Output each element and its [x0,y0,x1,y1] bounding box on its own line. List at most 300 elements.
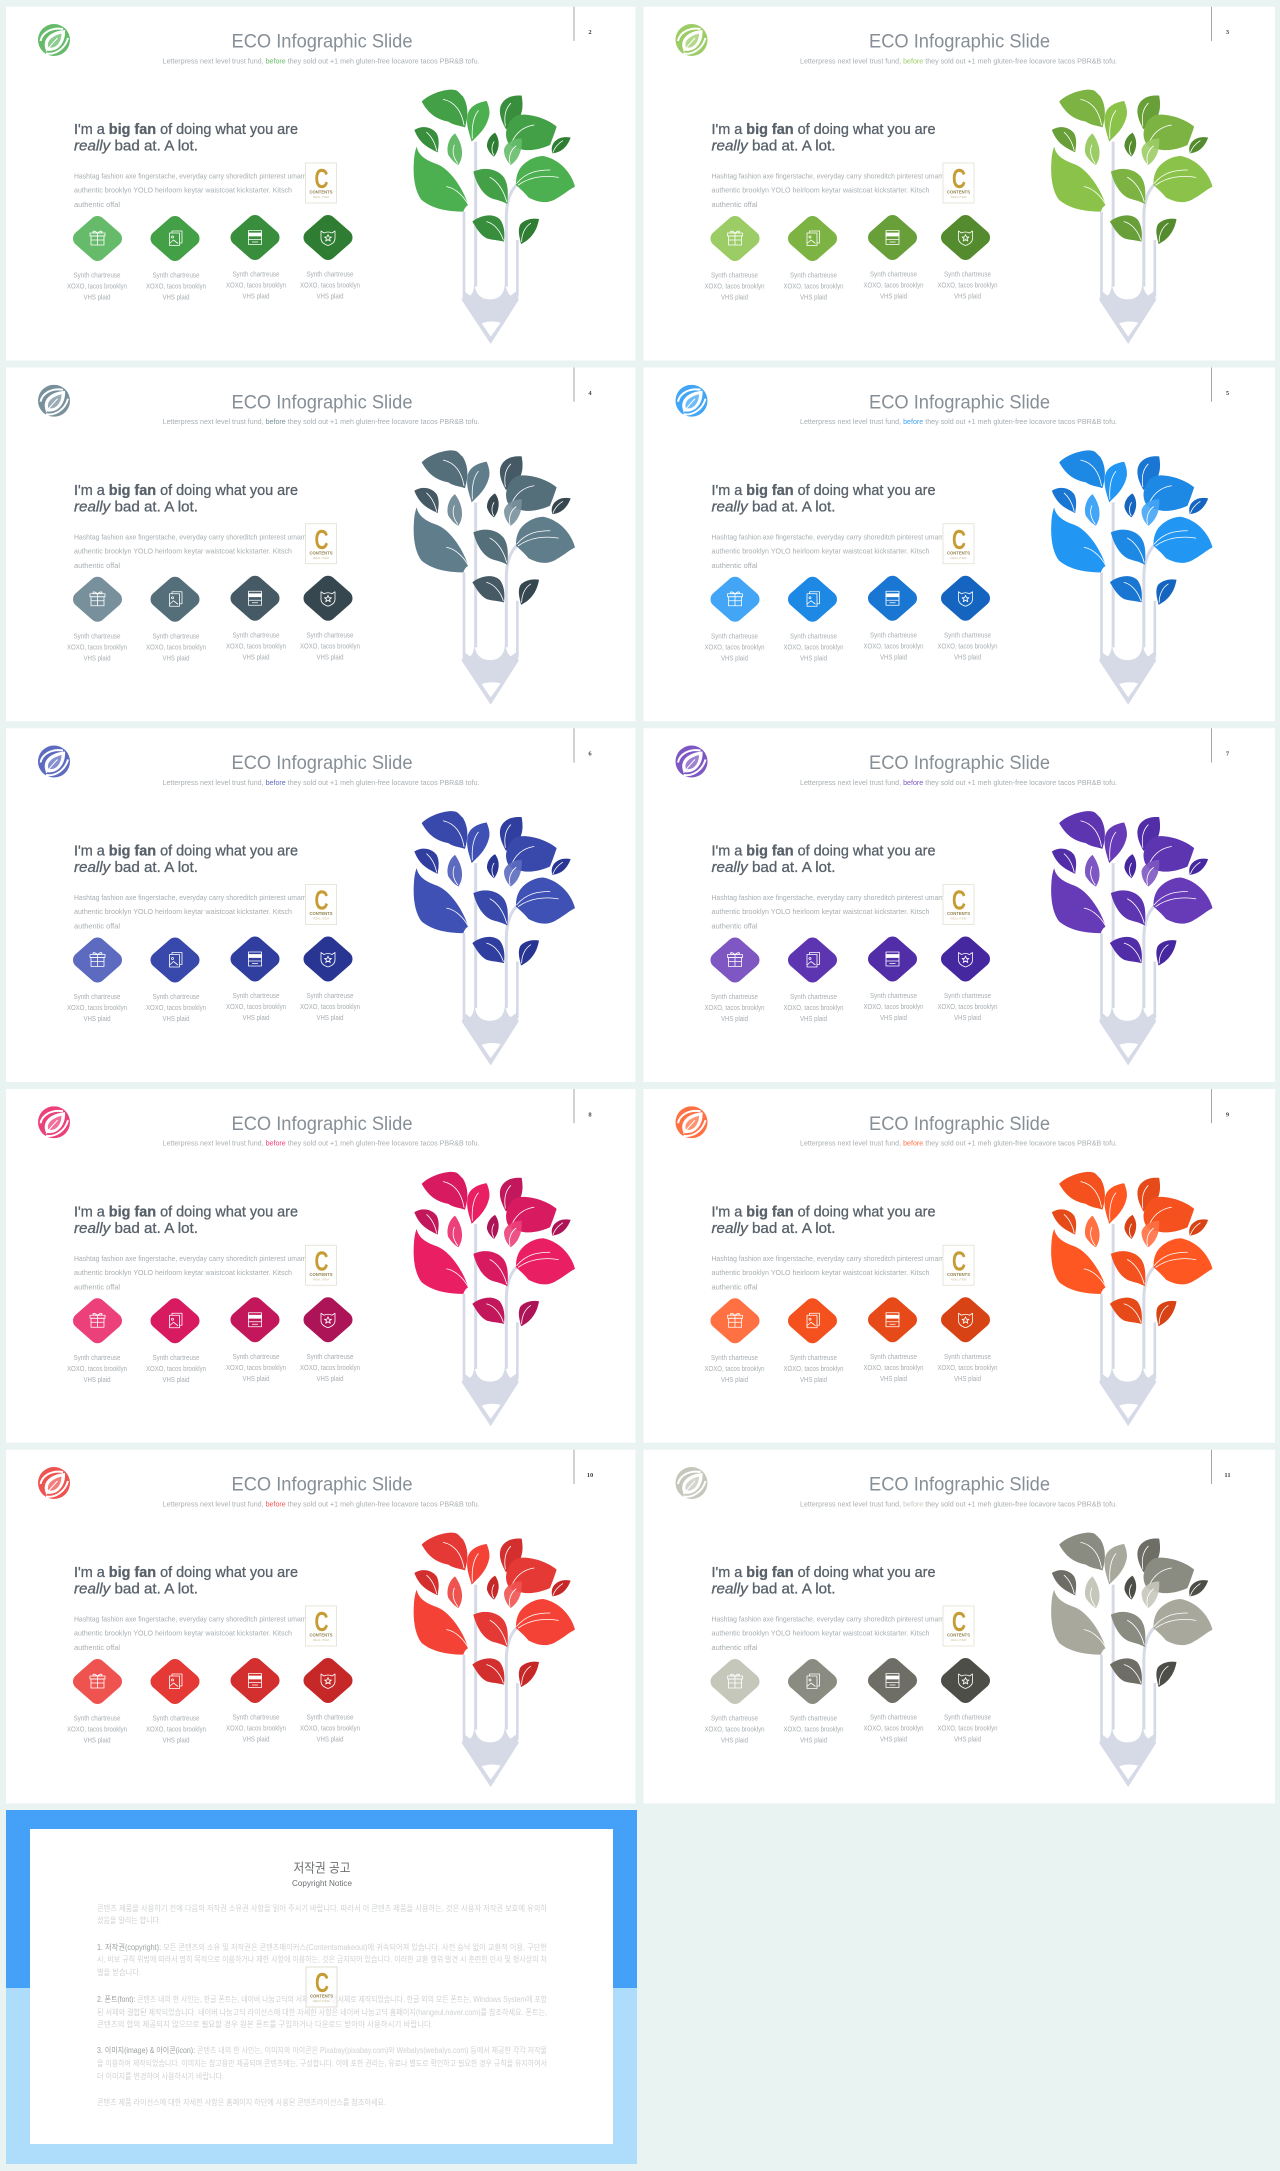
feature: shield: Synth chartreuse [944,1714,991,1722]
illustration: pencil tree [1051,811,1212,1066]
page tab [1212,1089,1230,1123]
feature: image: Synth chartreuse [790,994,837,1001]
paragraph: Hashtag fashion axe fingerstache, everyday carry shoreditch pinterest umami [712,893,946,902]
page tab: 10 [587,1472,593,1479]
copyright subtitle: Copyright Notice [292,1879,353,1888]
title: ECO Infographic Slide [232,752,412,774]
feature: calendar: XOXO, tacos brooklyn [864,1004,924,1011]
feature: gift: XOXO, tacos brooklyn [67,1005,127,1012]
heading: I'm a big fan of doing what you are [712,1204,936,1220]
feature: calendar [226,223,286,300]
paragraph [74,893,308,930]
copyright title: 저작권 공고 [294,1860,351,1876]
badge: REAL ITEM [951,556,967,560]
paragraph: Hashtag fashion axe fingerstache, everyday carry shoreditch pinterest umami [712,172,946,180]
badge: REAL ITEM [313,916,329,920]
feature: gift: Synth chartreuse [711,1355,758,1362]
feature: shield: Synth chartreuse [306,632,354,639]
badge: C [952,884,966,916]
feature: gift: VHS plaid [721,1377,748,1384]
feature: shield: VHS plaid [954,1015,981,1022]
page tab: 7 [1226,750,1230,758]
icon: leaf logo [38,385,70,417]
badge: REAL ITEM [313,195,329,199]
feature: image: XOXO, tacos brooklyn [784,1366,844,1373]
badge: CONTENTS [947,550,970,555]
feature: image: VHS plaid [162,1377,190,1384]
feature: shield: VHS plaid [316,1015,344,1022]
badge: REAL ITEM [313,1277,329,1281]
paragraph: Hashtag fashion axe fingerstache, everyday carry shoreditch pinterest umami [712,1614,946,1624]
illustration: pencil tree [1051,1172,1212,1426]
feature: gift [704,1667,765,1744]
paragraph [712,893,946,930]
paragraph: authentic brooklyn YOLO heirloom keytar waistcoat kickstarter. Kitsch [712,1268,930,1277]
feature: shield: VHS plaid [954,294,981,300]
badge [306,1967,337,2007]
slide background [644,1450,1275,1804]
feature: shield: Synth chartreuse [944,1354,991,1361]
white card [30,1829,613,2144]
page tab: 5 [1226,390,1230,397]
feature: gift: Synth chartreuse [74,1355,121,1362]
slide background [6,728,636,1082]
heading [74,483,298,515]
page tab [1212,1450,1231,1484]
feature: calendar: VHS plaid [880,1736,907,1744]
feature: calendar: Synth chartreuse [232,272,280,278]
title: ECO Infographic Slide [869,1474,1050,1496]
page tab: 2 [588,29,592,36]
notice intro: 셨음을 알리는 합니다. [97,1915,161,1925]
heading: really bad at. A lot. [74,1221,198,1237]
feature: image: XOXO, tacos brooklyn [146,1726,206,1734]
subtitle: Letterpress next level trust fund, before they sold out +1 meh gluten-free locavore tacos PBR&B tofu. [162,417,480,426]
badge: C [314,163,328,194]
feature: gift [67,224,127,302]
feature: gift: VHS plaid [84,1377,111,1384]
feature: image: VHS plaid [800,1377,827,1384]
badge [943,884,974,924]
paragraph: authentic brooklyn YOLO heirloom keytar waistcoat kickstarter. Kitsch [74,1268,292,1277]
badge: C [952,1606,966,1637]
feature: calendar: VHS plaid [880,1376,907,1383]
feature: calendar [864,223,924,300]
feature: image: VHS plaid [162,1016,190,1023]
feature: image: VHS plaid [800,294,827,302]
panel: slide 3 lime [644,7,1275,360]
slide background [6,367,636,721]
feature: calendar: Synth chartreuse [232,1714,280,1722]
feature: image: XOXO, tacos brooklyn [784,644,844,651]
heading: I'm a big fan of doing what you are [74,844,298,860]
feature: gift: VHS plaid [721,1016,748,1023]
feature: shield: VHS plaid [316,654,344,661]
feature: gift [67,946,127,1023]
feature: calendar: VHS plaid [242,294,270,300]
feature: shield [300,1666,360,1744]
heading: I'm a big fan of doing what you are [712,1565,936,1581]
heading [74,844,298,876]
background: blue top band [6,1810,637,1988]
icon: leaf logo [38,1106,70,1138]
feature: calendar: XOXO, tacos brooklyn [226,1365,286,1372]
feature: calendar [864,584,924,661]
badge: CONTENTS [310,1994,333,1998]
subtitle: Letterpress next level trust fund, before they sold out +1 meh gluten-free locavore tacos PBR&B tofu. [800,778,1117,787]
panel: slide 11 grey [644,1450,1275,1804]
feature: shield: VHS plaid [954,1736,981,1744]
feature: image: Synth chartreuse [790,633,837,640]
feature: calendar: Synth chartreuse [870,272,917,278]
page tab [574,728,592,762]
feature: image [784,1667,844,1744]
feature: gift [67,1306,127,1384]
feature: calendar [226,944,286,1022]
subtitle: Letterpress next level trust fund, before they sold out +1 meh gluten-free locavore tacos PBR&B tofu. [800,1499,1117,1508]
feature: shield [300,223,360,300]
background: light blue bottom band [6,1988,637,2164]
paragraph: authentic offal [712,922,758,930]
illustration: pencil tree [414,1172,575,1426]
notice 1: copyright: 1. 저작권(copyright): 모든 콘텐츠의 소유 및 저작권은 콘텐츠메이커스(Contentsmakeout)에 귀속되어져 있습니다. 사전 승낙 없이 교환적 이용, 구단현 [97,1942,547,1952]
feature: image: Synth chartreuse [152,994,200,1001]
feature: image: Synth chartreuse [790,1355,837,1362]
subtitle: Letterpress next level trust fund, before they sold out +1 meh gluten-free locavore tacos PBR&B tofu. [162,56,480,65]
panel: slide 5 blue [644,367,1275,721]
page tab: 6 [588,750,592,758]
paragraph: authentic brooklyn YOLO heirloom keytar waistcoat kickstarter. Kitsch [74,1629,292,1638]
title: ECO Infographic Slide [232,1113,412,1135]
feature: shield: XOXO, tacos brooklyn [938,1004,998,1011]
feature: calendar: XOXO, tacos brooklyn [864,1726,924,1732]
title: ECO Infographic Slide [869,30,1050,52]
icon: leaf logo [676,1467,708,1499]
panel: slide 8 pink [6,1089,636,1443]
feature: image: VHS plaid [162,294,190,302]
badge: CONTENTS [309,911,333,916]
feature: gift: XOXO, tacos brooklyn [67,1726,127,1734]
notice 2: font: 콘텐츠의 합의 제공되지 않으므로 필요할 경우 원본 폰트를 구입하거나 다운로드 받아야 사용하시기 바랍니다. [97,2019,433,2029]
feature: gift: XOXO, tacos brooklyn [67,1366,127,1373]
page tab: 9 [1226,1111,1230,1118]
feature: calendar: VHS plaid [242,1376,270,1383]
feature: calendar: Synth chartreuse [870,993,917,1000]
feature: shield: XOXO, tacos brooklyn [938,1365,998,1372]
badge: C [315,1967,329,1998]
badge [306,1606,336,1646]
illustration: pencil tree [414,450,575,705]
notice closing line: 콘텐츠 제품 라이선스에 대한 자세한 사항은 홈페이지 하단에 사용된 콘텐츠라이선스를 참조하세요. [97,2097,386,2107]
paragraph: authentic brooklyn YOLO heirloom keytar waistcoat kickstarter. Kitsch [712,546,930,555]
paragraph: authentic offal [712,200,758,209]
paragraph: authentic brooklyn YOLO heirloom keytar waistcoat kickstarter. Kitsch [712,1629,930,1638]
page tab [574,1089,592,1123]
feature: image: Synth chartreuse [152,1355,200,1362]
feature: image: XOXO, tacos brooklyn [146,1005,206,1012]
heading: I'm a big fan of doing what you are [712,844,936,860]
feature: shield: Synth chartreuse [306,272,354,278]
feature: image [146,1306,206,1384]
badge [306,1245,336,1285]
paragraph: authentic brooklyn YOLO heirloom keytar waistcoat kickstarter. Kitsch [712,907,930,916]
badge: CONTENTS [309,550,333,555]
feature: shield [938,1666,998,1744]
panel: slide 6 indigo [6,728,636,1082]
notice 3: image and icon: 더 이미지를 변경하여 사용하시기 바랍니다. [97,2071,224,2081]
feature: calendar: VHS plaid [242,654,270,661]
paragraph [74,1614,308,1652]
paragraph: authentic brooklyn YOLO heirloom keytar waistcoat kickstarter. Kitsch [712,186,930,195]
badge: CONTENTS [309,1272,333,1277]
paragraph [712,1614,946,1652]
heading: I'm a big fan of doing what you are [74,122,298,138]
paragraph: authentic offal [712,561,758,570]
slide background [644,7,1275,360]
feature: shield [300,944,360,1022]
heading: really bad at. A lot. [712,499,836,515]
feature: calendar [864,944,924,1022]
page tab [574,7,592,41]
feature: image: VHS plaid [800,1016,827,1023]
feature: image: XOXO, tacos brooklyn [146,1366,206,1373]
notice intro: 콘텐츠 제품을 사용하기 전에 다음의 저작권 소유권 사항을 읽어 주시기 바랍니다. 따라서 이 콘텐츠 제품을 사용하는, 것은 사용자 저작권 보호에 유의하 [97,1903,548,1913]
feature: gift: VHS plaid [84,294,111,302]
paragraph: Hashtag fashion axe fingerstache, everyday carry shoreditch pinterest umami [74,893,308,902]
feature: calendar: VHS plaid [242,1015,270,1022]
panel: copyright notice [6,1810,637,2164]
feature: gift: Synth chartreuse [74,1716,121,1722]
paragraph [712,532,946,570]
feature: shield: VHS plaid [954,1376,981,1383]
illustration: pencil tree [414,811,575,1066]
feature: image: VHS plaid [800,655,827,662]
feature: gift: XOXO, tacos brooklyn [704,644,765,651]
illustration: pencil tree [1051,1533,1212,1787]
paragraph: authentic offal [74,1643,120,1652]
feature: calendar: VHS plaid [242,1736,270,1744]
notice intro [97,1903,548,1925]
feature: gift [67,1667,127,1744]
feature: gift: VHS plaid [721,655,748,662]
feature: shield [938,1305,998,1383]
feature: image [146,224,206,302]
heading: really bad at. A lot. [712,1221,836,1237]
feature: calendar: XOXO, tacos brooklyn [226,643,286,650]
feature: image: XOXO, tacos brooklyn [146,284,206,290]
badge: CONTENTS [947,1632,970,1638]
paragraph [712,172,946,209]
notice 2: font: 2. 폰트(font): 콘텐츠 내의 한 사인는, 한글 폰트는, 네이버 나눔고딕의 서체 및 시스템서체로 제작되었습니다. 한글 외의 모든 폰트는, Windows System에 포함 [97,1994,548,2004]
feature: calendar: XOXO, tacos brooklyn [226,1726,286,1732]
feature: image [146,1667,206,1744]
feature: image: Synth chartreuse [152,1716,200,1722]
badge: CONTENTS [947,911,970,916]
icon: leaf logo [676,385,708,417]
paragraph: authentic offal [74,200,120,209]
feature: image: XOXO, tacos brooklyn [784,1726,844,1734]
illustration: pencil tree [1051,90,1212,344]
feature: calendar: XOXO, tacos brooklyn [226,1004,286,1011]
feature: gift: XOXO, tacos brooklyn [704,1726,765,1734]
page tab [1212,728,1230,762]
badge: CONTENTS [309,190,333,194]
subtitle: Letterpress next level trust fund, before they sold out +1 meh gluten-free locavore tacos PBR&B tofu. [800,56,1117,65]
badge [306,884,336,924]
notice 3: image and icon: 3. 이미지(image) & 아이콘(icon): 콘텐츠 내의 한 사인는, 이미지와 아이콘은 Pixabay(pixabay.com)와 Webalys(webalys.com) 등에서 제공한 각각 저작물 [97,2045,547,2055]
feature: gift [67,585,127,662]
title: ECO Infographic Slide [232,30,412,52]
panel: slide 10 red [6,1450,636,1804]
badge: CONTENTS [947,190,970,194]
feature: image [146,585,206,662]
feature: calendar [226,1666,286,1744]
badge [943,1245,974,1285]
feature: gift: Synth chartreuse [711,633,758,640]
heading: really bad at. A lot. [74,860,198,876]
badge: REAL ITEM [314,1999,330,2003]
feature: shield: XOXO, tacos brooklyn [938,282,998,290]
heading [712,844,936,876]
heading: really bad at. A lot. [74,139,198,155]
paragraph: authentic offal [712,1282,758,1291]
heading: I'm a big fan of doing what you are [74,1565,298,1581]
notice 2: font: 된 서체와 결합된 제작되었습니다. 네이버 나눔고딕 라이선스에 대한 자세한 사항은 네이버 나눔고딕 홈페이지(hangeul.naver.com)를 참조하세요. 폰트는, [97,2007,547,2017]
page tab [1212,7,1230,41]
paragraph: Hashtag fashion axe fingerstache, everyday carry shoreditch pinterest umami [74,1254,308,1263]
badge: REAL ITEM [951,916,967,920]
feature: shield: Synth chartreuse [944,272,991,278]
feature: calendar: XOXO, tacos brooklyn [226,282,286,290]
slide background [6,1450,636,1804]
feature: shield: Synth chartreuse [944,993,991,1000]
feature: gift: Synth chartreuse [711,1716,758,1722]
feature: calendar: Synth chartreuse [870,1354,917,1361]
paragraph [74,532,308,570]
feature: shield: XOXO, tacos brooklyn [300,1365,360,1372]
subtitle: Letterpress next level trust fund, before they sold out +1 meh gluten-free locavore tacos PBR&B tofu. [162,1139,480,1148]
feature: image: XOXO, tacos brooklyn [784,284,844,290]
heading [74,122,298,155]
paragraph: Hashtag fashion axe fingerstache, everyday carry shoreditch pinterest umami [74,532,308,541]
feature: image: VHS plaid [162,655,190,662]
feature: shield: XOXO, tacos brooklyn [300,1726,360,1732]
title: ECO Infographic Slide [869,1113,1050,1135]
icon: leaf logo [38,24,70,56]
feature: gift: Synth chartreuse [711,994,758,1001]
feature: shield: Synth chartreuse [306,993,354,1000]
feature: calendar [864,1305,924,1383]
feature: image: XOXO, tacos brooklyn [146,644,206,651]
icon: leaf logo [676,1106,708,1138]
notice 1: copyright [97,1942,547,1977]
page tab: 3 [1226,29,1230,36]
feature: image: VHS plaid [162,1738,190,1744]
heading: really bad at. A lot. [712,860,836,876]
paragraph [712,1254,946,1291]
feature: calendar: Synth chartreuse [232,1354,280,1361]
feature: image: VHS plaid [800,1738,827,1744]
feature: calendar [864,1666,924,1744]
feature: image [146,946,206,1023]
badge: REAL ITEM [313,1638,329,1642]
page tab: 8 [588,1111,592,1118]
feature: shield: VHS plaid [316,294,344,300]
heading [74,1565,298,1598]
feature: gift: VHS plaid [721,1738,748,1744]
paragraph: authentic brooklyn YOLO heirloom keytar waistcoat kickstarter. Kitsch [74,546,292,555]
heading [712,1565,936,1598]
paragraph: Hashtag fashion axe fingerstache, everyday carry shoreditch pinterest umami [712,532,946,541]
badge: REAL ITEM [951,1638,967,1642]
feature: gift: VHS plaid [84,655,111,662]
slide background [6,1089,636,1443]
notice 3: image and icon [97,2045,547,2081]
illustration: pencil tree [414,1533,575,1787]
badge: C [952,1245,966,1276]
heading [712,1204,936,1237]
feature: gift: XOXO, tacos brooklyn [67,644,127,651]
paragraph: Hashtag fashion axe fingerstache, everyday carry shoreditch pinterest umami [712,1254,946,1263]
feature: shield: VHS plaid [316,1376,344,1383]
illustration: pencil tree [414,90,575,344]
feature: gift [704,585,765,662]
feature: calendar: Synth chartreuse [870,1714,917,1722]
slide background [644,1089,1275,1443]
feature: gift: XOXO, tacos brooklyn [704,284,765,290]
feature: image [784,946,844,1023]
heading: really bad at. A lot. [712,139,836,155]
feature: calendar: Synth chartreuse [232,632,280,639]
page tab [1212,367,1230,402]
icon: leaf logo [676,746,708,778]
paragraph: authentic offal [712,1643,758,1652]
feature: image: Synth chartreuse [790,272,837,280]
badge: C [314,884,328,916]
feature: calendar: XOXO, tacos brooklyn [864,282,924,290]
feature: calendar: Synth chartreuse [232,993,280,1000]
page tab: 11 [1224,1472,1231,1479]
feature: gift: XOXO, tacos brooklyn [704,1366,765,1373]
icon: leaf logo [38,746,70,778]
feature: calendar: VHS plaid [880,294,907,300]
heading: really bad at. A lot. [74,499,198,515]
feature: shield: XOXO, tacos brooklyn [300,282,360,290]
page tab: 4 [588,390,592,397]
illustration: pencil tree [1051,450,1212,705]
paragraph: Hashtag fashion axe fingerstache, everyday carry shoreditch pinterest umami [74,172,308,180]
paragraph: authentic brooklyn YOLO heirloom keytar waistcoat kickstarter. Kitsch [74,907,292,916]
feature: gift: VHS plaid [84,1016,111,1023]
feature: image: Synth chartreuse [152,633,200,640]
feature: gift: Synth chartreuse [711,272,758,280]
feature: gift: Synth chartreuse [74,272,121,280]
feature: shield: Synth chartreuse [306,1354,354,1361]
feature: gift: XOXO, tacos brooklyn [67,284,127,290]
feature: shield [938,584,998,661]
feature: calendar: XOXO, tacos brooklyn [864,643,924,650]
subtitle: Letterpress next level trust fund, before they sold out +1 meh gluten-free locavore tacos PBR&B tofu. [800,417,1117,426]
notice 2: font [97,1994,548,2029]
feature: shield: Synth chartreuse [306,1714,354,1722]
badge: REAL ITEM [951,195,967,199]
heading: I'm a big fan of doing what you are [712,483,936,499]
slide background [644,367,1275,721]
feature: shield [300,1305,360,1383]
heading: I'm a big fan of doing what you are [74,483,298,499]
badge: REAL ITEM [313,556,329,560]
badge: C [314,1606,328,1637]
